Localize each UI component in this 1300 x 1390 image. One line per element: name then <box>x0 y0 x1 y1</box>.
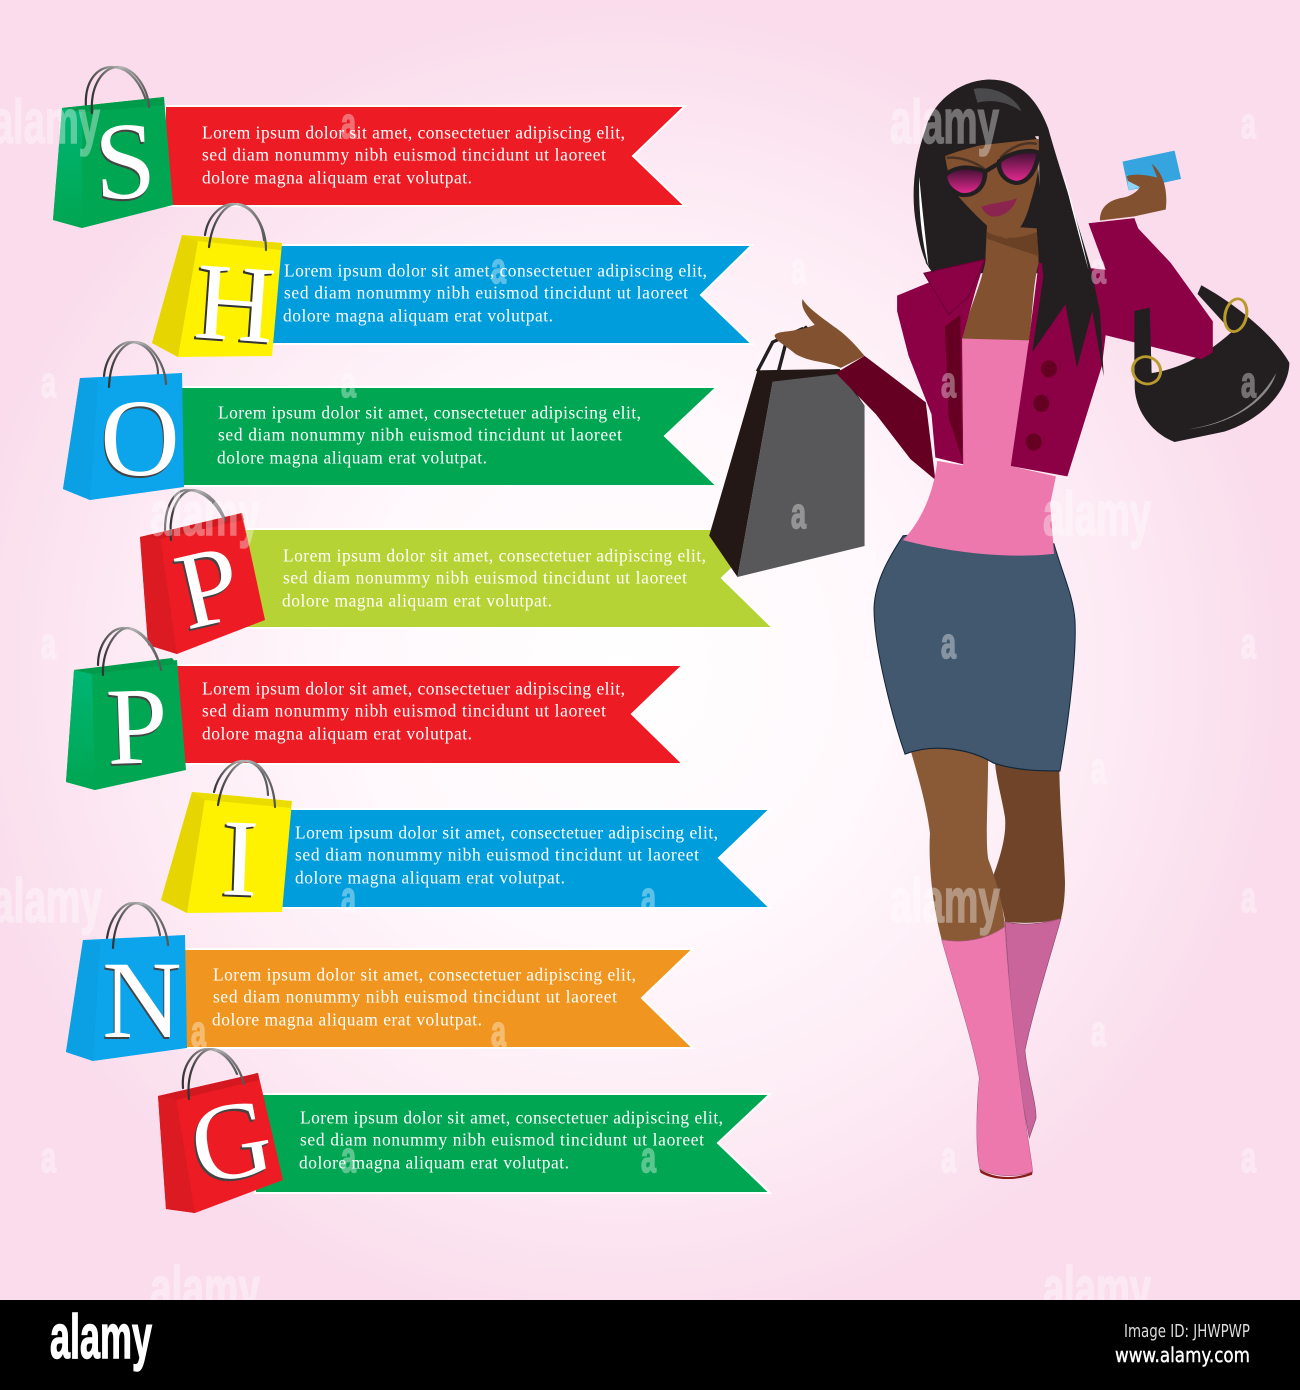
ribbon panel: S: sed diam nonummy nibh euismod tincidunt ut laoreet <box>202 144 606 164</box>
watermark: alamy and a marks: alamy <box>890 88 999 157</box>
watermark: alamy and a marks: a <box>1091 1007 1106 1056</box>
jacket <box>897 218 1213 476</box>
watermark: alamy and a marks: a <box>41 358 56 407</box>
watermark: alamy and a marks: a <box>1241 1133 1256 1182</box>
watermark: alamy and a marks: alamy <box>150 1255 260 1324</box>
shopping bag: H <box>152 204 282 368</box>
ribbon panel: H: Lorem ipsum dolor sit amet, consectetuer adipiscing elit, <box>284 260 707 280</box>
shopping bag: P second: P <box>104 664 170 788</box>
footer bar <box>0 1300 1300 1390</box>
eyelashes <box>947 143 1037 170</box>
face <box>945 139 1040 239</box>
website: www.alamy.com <box>1115 1343 1250 1367</box>
ribbon panel: G: dolore magna aliquam erat volutpat. <box>299 1152 569 1172</box>
ribbon panel: P second: Lorem ipsum dolor sit amet, consectetuer adipiscing elit, <box>202 678 625 698</box>
shopping bag: P <box>140 490 265 656</box>
ribbon panel: N <box>180 949 693 1048</box>
ribbon panel: P second <box>175 665 683 764</box>
shopping bag: N: N <box>101 941 181 1063</box>
watermark: alamy and a marks: alamy <box>890 867 1000 936</box>
ribbon panel: N: Lorem ipsum dolor sit amet, consectetuer adipiscing elit, <box>213 964 636 984</box>
shopping bag: S <box>53 67 173 228</box>
ribbon panel: P second: sed diam nonummy nibh euismod tincidunt ut laoreet <box>202 700 606 720</box>
shopping bag: I: I <box>220 796 260 920</box>
shopping bag: P second: P <box>103 666 169 790</box>
watermark: alamy and a marks: a <box>341 358 356 407</box>
shopping bag: S: S <box>91 101 157 225</box>
ribbon panel: P second: dolore magna aliquam erat volutpat. <box>202 724 472 744</box>
watermark: alamy and a marks: a <box>1091 744 1106 793</box>
pink top <box>903 339 1056 556</box>
shopping bag: H: H <box>191 239 279 367</box>
shopping bag: P second <box>66 628 186 790</box>
watermark: alamy and a marks: a <box>341 99 356 148</box>
ribbon panel: G: sed diam nonummy nibh euismod tincidunt ut laoreet <box>300 1130 704 1150</box>
watermark: alamy and a marks: a <box>1241 358 1256 407</box>
legs, skirt and boots <box>874 534 1075 1179</box>
watermark: alamy and a marks: a <box>1241 99 1256 148</box>
raised arm hand and card <box>1100 151 1181 221</box>
ribbon panel: G: Lorem ipsum dolor sit amet, consectetuer adipiscing elit, <box>300 1108 723 1128</box>
lips <box>981 198 1017 217</box>
watermark: alamy and a marks: a <box>941 1133 956 1182</box>
shopping bag: N: N <box>102 939 182 1061</box>
shopping bag: P: P <box>165 521 252 653</box>
watermark: alamy and a marks: a <box>491 1007 506 1056</box>
ribbon panel: H: dolore magna aliquam erat volutpat. <box>283 306 553 326</box>
shopping bag: I: I <box>217 798 258 922</box>
ribbon panel: N: sed diam nonummy nibh euismod tincidunt ut laoreet <box>213 986 617 1006</box>
sunglasses <box>945 151 1039 195</box>
watermark: alamy and a marks: a <box>1091 244 1106 293</box>
watermark: alamy and a marks: a <box>491 489 506 538</box>
ribbon panel: P: Lorem ipsum dolor sit amet, consectetuer adipiscing elit, <box>283 546 706 566</box>
ribbon panel: P: sed diam nonummy nibh euismod tincidunt ut laoreet <box>283 568 687 588</box>
ribbon panel: O <box>175 387 717 486</box>
watermark: alamy and a marks: alamy <box>1043 480 1151 549</box>
watermark: alamy and a marks: a <box>191 1007 206 1056</box>
ribbon panel: O: dolore magna aliquam erat volutpat. <box>217 448 487 468</box>
watermark: alamy and a marks: a <box>641 873 656 922</box>
shopping bag: H: H <box>189 241 277 368</box>
shopping bag: G: G <box>180 1076 279 1210</box>
shopping bag: O: O <box>99 379 179 501</box>
ribbon panel: N: dolore magna aliquam erat volutpat. <box>212 1010 482 1030</box>
watermark: alamy and a marks: a <box>941 619 956 668</box>
left hand <box>775 299 865 368</box>
neck and chest <box>962 225 1039 340</box>
image id: Image ID: JHWPWP <box>1124 1321 1250 1342</box>
watermark: alamy and a marks: a <box>341 1133 356 1182</box>
shopping bag: P: P <box>163 523 250 656</box>
watermark: alamy and a marks: a <box>791 489 806 538</box>
ribbon panel: P: dolore magna aliquam erat volutpat. <box>282 590 552 610</box>
watermark: alamy and a marks: alamy <box>1043 1255 1151 1324</box>
hair back <box>914 80 1044 273</box>
ribbon panel: P <box>240 529 773 628</box>
bag strap and rings <box>1128 297 1250 388</box>
hair front <box>926 80 1104 377</box>
shopping bag: O: O <box>100 377 180 499</box>
ribbon panel: O: sed diam nonummy nibh euismod tincidunt ut laoreet <box>218 424 622 444</box>
watermark: alamy and a marks: a <box>41 619 56 668</box>
ribbon panel: I: Lorem ipsum dolor sit amet, consectetuer adipiscing elit, <box>295 822 718 842</box>
shopping bag: S: S <box>92 99 158 223</box>
watermark: alamy and a marks: a <box>41 1133 56 1182</box>
shopping bag: G <box>158 1049 283 1213</box>
fashion woman figure <box>709 80 1289 1179</box>
watermark: alamy and a marks: a <box>1241 619 1256 668</box>
ribbon panel: I: dolore magna aliquam erat volutpat. <box>295 868 565 888</box>
ribbon panel: S <box>165 106 685 206</box>
shopping bag: N <box>66 903 187 1063</box>
ribbon panel: G <box>255 1094 770 1193</box>
watermark: alamy and a marks: alamy <box>150 480 260 549</box>
ribbon panel: S: dolore magna aliquam erat volutpat. <box>202 168 472 188</box>
shopping bag: O <box>63 342 184 501</box>
ribbon panel: H: sed diam nonummy nibh euismod tincidunt ut laoreet <box>284 282 688 302</box>
shopping bag: I <box>161 761 292 922</box>
watermark: alamy and a marks: a <box>791 244 806 293</box>
ribbon panel: O: Lorem ipsum dolor sit amet, consectetuer adipiscing elit, <box>218 402 641 422</box>
footer logo: alamy <box>50 1303 152 1372</box>
watermark: alamy and a marks: a <box>491 244 506 293</box>
handbag <box>1134 285 1289 442</box>
shopping bag: G: G <box>181 1074 281 1208</box>
watermark: alamy and a marks: a <box>941 358 956 407</box>
ribbon panel: S: Lorem ipsum dolor sit amet, consectetuer adipiscing elit, <box>202 122 625 142</box>
watermark: alamy and a marks: a <box>341 873 356 922</box>
ribbon panel: I <box>275 809 770 908</box>
watermark: alamy and a marks: a <box>1241 873 1256 922</box>
left sleeve <box>836 356 935 480</box>
upper body <box>709 80 1289 577</box>
ribbon panel: H <box>262 245 752 344</box>
grey shopping bag <box>709 327 865 577</box>
ribbon panel: I: sed diam nonummy nibh euismod tincidunt ut laoreet <box>295 844 699 864</box>
watermark: alamy and a marks: a <box>641 1133 656 1182</box>
